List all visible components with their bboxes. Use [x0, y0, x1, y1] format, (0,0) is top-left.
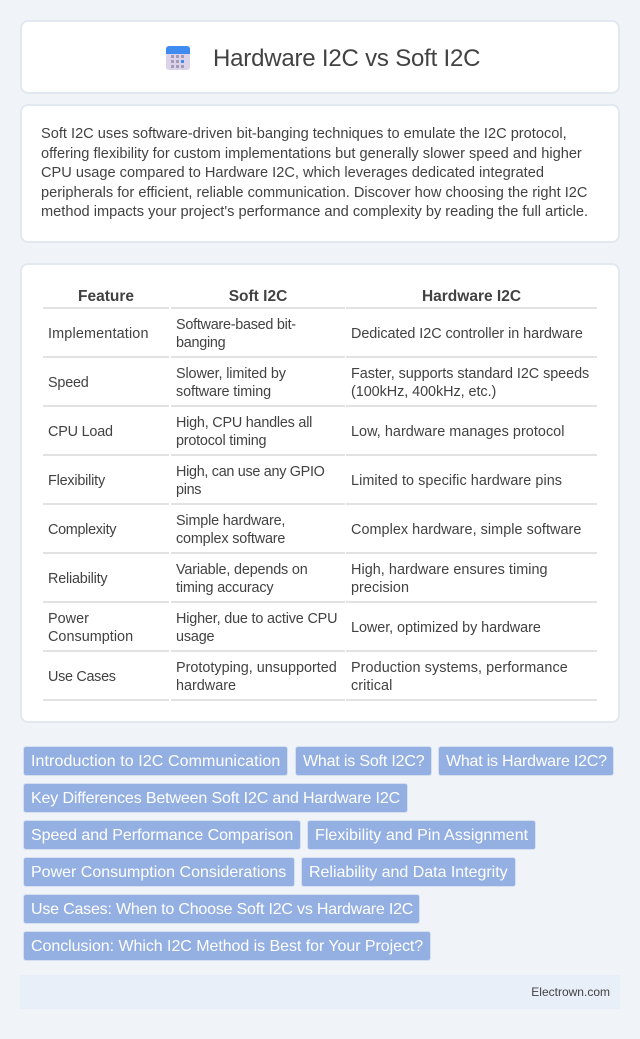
row: Flexibility: Flexibility [48, 473, 105, 489]
tag: Power Consumption Considerations [31, 864, 286, 881]
tag: What is Soft I2C? [303, 753, 424, 770]
row: CPU Load: CPU Load [48, 424, 113, 440]
tag: Use Cases: When to Choose Soft I2C vs Hardware I2C [31, 901, 413, 918]
tag: Flexibility and Pin Assignment [315, 827, 528, 844]
row: Reliability: Reliability [48, 571, 107, 587]
footer source text: Electrown.com [531, 985, 610, 999]
tag [23, 820, 301, 850]
comparison table: Simple hardware, [176, 513, 285, 529]
tag [301, 857, 516, 887]
row: Speed: Speed [48, 375, 89, 391]
comparison table: Prototyping, unsupported [176, 660, 337, 676]
intro card [20, 104, 620, 243]
comparison table: Higher, due to active CPU [176, 611, 337, 627]
tag [23, 857, 295, 887]
comparison table: (100kHz, 400kHz, etc.) [351, 384, 496, 400]
tag: What is Hardware I2C? [446, 753, 607, 770]
comparison table: critical [351, 678, 392, 694]
comparison table: pins [176, 482, 201, 498]
intro text: CPU usage compared to Hardware I2C, which leverages dedicated integrated [41, 165, 544, 181]
intro text: Soft I2C uses software-driven bit-banging techniques to emulate the I2C protocol, [41, 126, 567, 142]
intro text: offering flexibility for custom implementations but generally slower speed and higher [41, 146, 582, 162]
tag [23, 931, 431, 961]
tag [295, 746, 432, 776]
comparison table: complex software [176, 531, 285, 547]
comparison table: protocol timing [176, 433, 266, 449]
tag: Key Differences Between Soft I2C and Hardware I2C [31, 790, 400, 807]
header card [20, 20, 620, 94]
comparison table: Slower, limited by [176, 366, 286, 382]
tag [307, 820, 536, 850]
comparison table: precision [351, 580, 409, 596]
comparison table: Limited to specific hardware pins [351, 473, 562, 489]
comparison table: banging [176, 335, 225, 351]
row: Use Cases: Use Cases [48, 669, 116, 685]
comparison table: hardware [176, 678, 236, 694]
comparison table: Variable, depends on [176, 562, 308, 578]
row: Power Consumption: Consumption [48, 629, 133, 645]
comparison table: Production systems, performance [351, 660, 568, 676]
tag: Conclusion: Which I2C Method is Best for Your Project? [31, 938, 423, 955]
tag [23, 746, 288, 776]
tag: Reliability and Data Integrity [309, 864, 508, 881]
row: Complexity: Complexity [48, 522, 116, 538]
intro text [41, 126, 588, 220]
comparison table: High, CPU handles all [176, 415, 312, 431]
comparison table: usage [176, 629, 214, 645]
column heading: Hardware I2C: Hardware I2C [422, 288, 521, 305]
comparison table: Dedicated I2C controller in hardware [351, 326, 583, 342]
tag [438, 746, 614, 776]
intro text: peripherals for efficient, reliable communication. Discover how choosing the right I2C [41, 184, 587, 200]
tag [23, 894, 420, 924]
row: Power Consumption [48, 611, 133, 645]
topic tags [23, 746, 614, 961]
tag: Introduction to I2C Communication [31, 753, 280, 770]
comparison table: Faster, supports standard I2C speeds [351, 366, 589, 382]
comparison table: software timing [176, 384, 271, 400]
row: Implementation: Implementation [48, 326, 149, 342]
column heading: Soft I2C: Soft I2C [229, 288, 287, 305]
icon: calculator app [166, 46, 190, 70]
title: Hardware I2C vs Soft I2C [213, 45, 480, 72]
comparison table: Low, hardware manages protocol [351, 424, 564, 440]
comparison table: High, can use any GPIO [176, 464, 325, 480]
comparison table panel [20, 263, 620, 723]
intro text: method impacts your project's performance and complexity by reading the full article. [41, 204, 588, 220]
tag: Speed and Performance Comparison [31, 827, 293, 844]
footer bar [20, 975, 620, 1009]
comparison table [43, 288, 597, 701]
comparison table: timing accuracy [176, 580, 273, 596]
tag [23, 783, 408, 813]
row: Power Consumption: Power [48, 611, 89, 627]
comparison table: Software-based bit- [176, 317, 296, 333]
column heading: Feature: Feature [78, 288, 134, 305]
comparison table: Complex hardware, simple software [351, 522, 581, 538]
comparison table: High, hardware ensures timing [351, 562, 548, 578]
comparison table: Lower, optimized by hardware [351, 620, 541, 636]
